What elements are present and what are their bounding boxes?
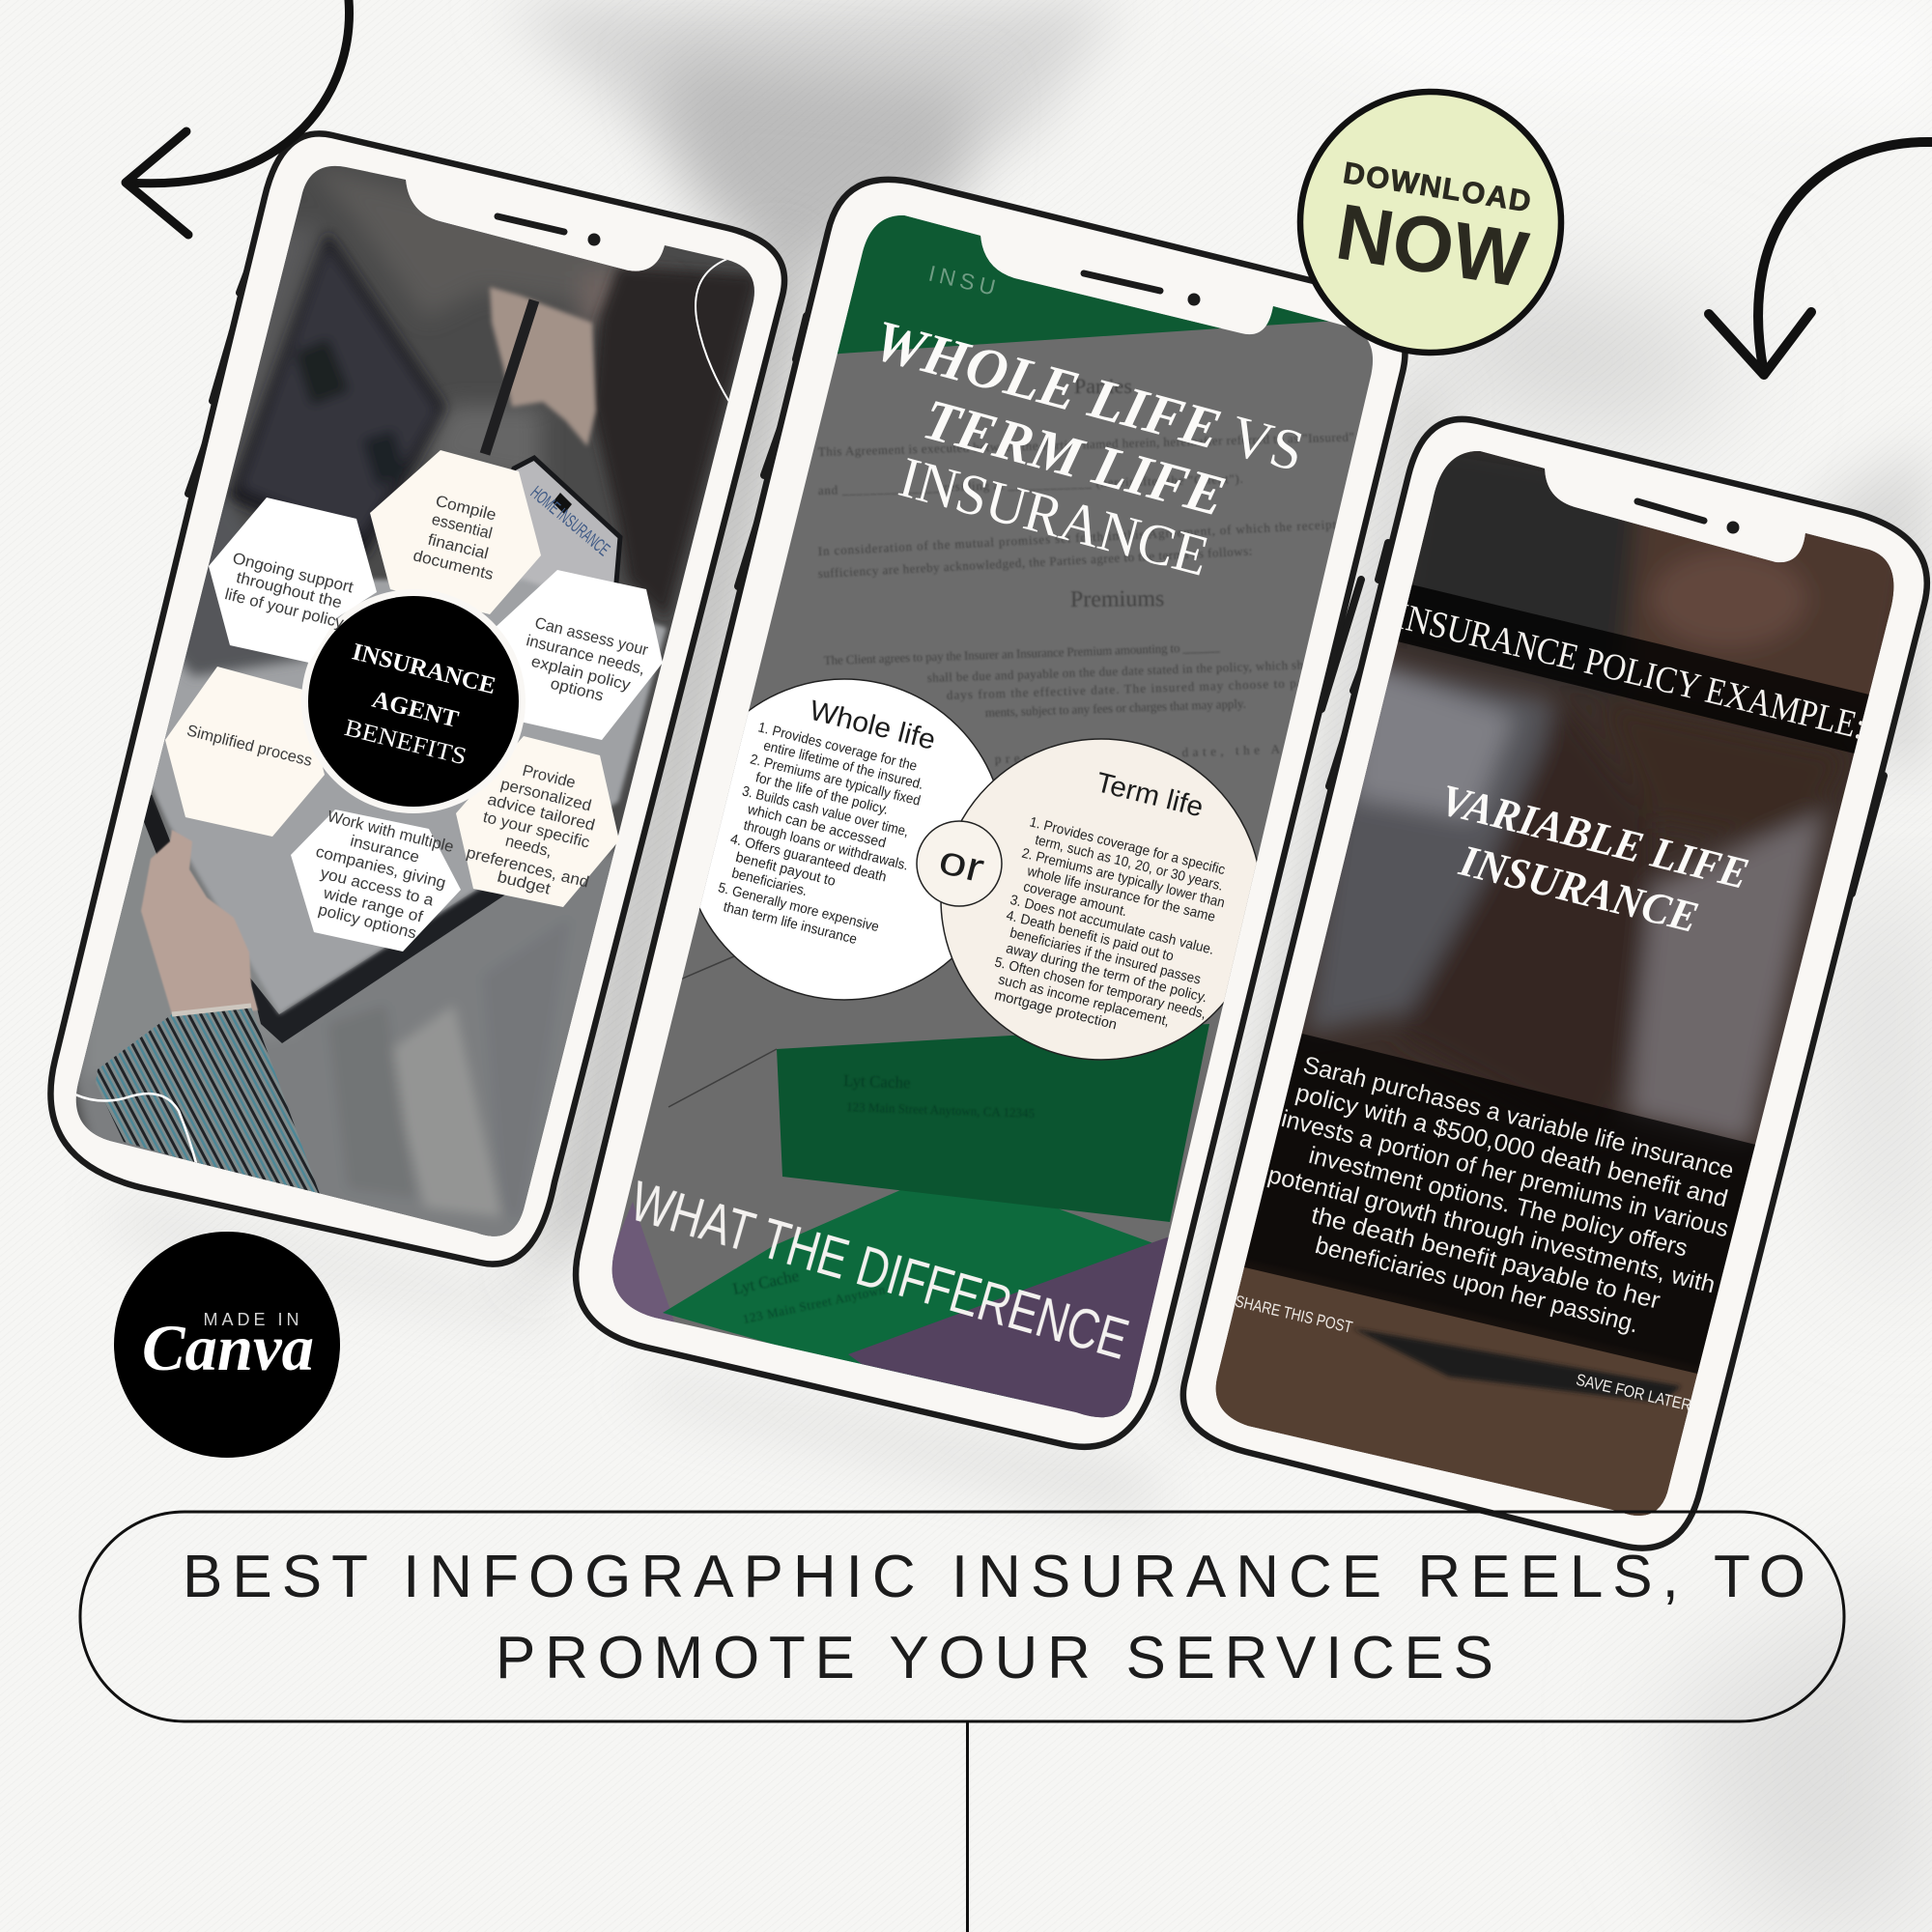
hexagon: compile documents: documents: [412, 547, 496, 583]
hexagon: compile documents: Compile: [434, 493, 497, 525]
hexagon: assess needs: insurance needs,: [525, 632, 647, 678]
title: whole life vs term life insurance: INSURANCE: [893, 444, 1215, 588]
title text: BEST INFOGRAPHIC INSURANCE REELS, TO: [183, 1544, 1805, 1610]
clipboard with home insurance form: [511, 455, 622, 587]
contract text: Lyt Cache: [843, 1071, 911, 1092]
or badge: or: [935, 837, 989, 891]
contract text: shall be due and payable on the due date stated in the policy, which shall be: [927, 656, 1333, 685]
contract text: 123 Main Street Anytown, CA 12345: [846, 1099, 1035, 1121]
hexagon: personalized advice: budget: [496, 868, 553, 898]
phone 2 speaker: [1084, 273, 1160, 291]
hexagon: personalized advice: preferences, and: [465, 844, 590, 892]
phone 1 screen: [58, 145, 773, 1256]
clipboard with home insurance form: HOME INSURANCE: [526, 483, 613, 560]
panel: whole life: entire lifetime of the insured.: [762, 738, 924, 793]
phone 1: insurance agent benefits: [50, 133, 784, 1264]
panel: term life: 2. Premiums are typically lower than: [1020, 846, 1226, 911]
badge: made in canva: MADE IN: [203, 1310, 303, 1329]
phone 2 screen: [612, 215, 1374, 1418]
panel: whole life: than term life insurance: [722, 899, 859, 948]
contract text: In consideration of the mutual promises set forth in this Agreement, of which the receipt: [817, 517, 1337, 558]
panel: whole life: for the life of the policy.: [753, 770, 890, 818]
panel: term life: 1. Provides coverage for a specific: [1028, 814, 1227, 878]
center circle: insurance agent benefits: [301, 589, 526, 813]
contract text: days from the effective date. The insured may choose to pay the: [947, 674, 1333, 702]
center circle: insurance agent benefits: AGENT: [369, 687, 462, 733]
text block: sarah example: investment options. The policy offers: [1306, 1142, 1690, 1263]
panel: whole life: benefit payout to: [734, 850, 838, 890]
title: variable life insurance: INSURANCE: [1454, 836, 1703, 942]
hexagon: simplified process: [165, 667, 325, 837]
phone 1 body: [50, 133, 784, 1264]
panel: term life: 3. Does not accumulate cash value.: [1009, 893, 1215, 958]
phone 3 side buttons: [1329, 543, 1884, 894]
phone 1 speaker: [497, 216, 564, 232]
panel: term life: [941, 739, 1262, 1060]
phone 3 speaker: [1637, 501, 1704, 521]
panel: whole life: Whole life: [807, 696, 939, 756]
contract text: The Client agrees to pay the Insurer an Insurance Premium amounting to ______: [824, 639, 1220, 668]
hexagon: multiple companies: policy options: [317, 901, 418, 942]
panel: term life: Term life: [1093, 767, 1207, 823]
badge: download now: DOWNLOAD: [1341, 156, 1533, 218]
panel: whole life: 5. Generally more expensive: [717, 880, 880, 935]
badge: made in canva: Canva: [142, 1311, 314, 1384]
hexagon: assess needs: [495, 570, 663, 740]
phone 2: whole life vs term life: [576, 180, 1410, 1449]
phone 3: variable life insurance: [1183, 419, 1927, 1548]
badge: download now: [1300, 92, 1561, 353]
hexagon: assess needs: Can assess your: [533, 614, 650, 660]
title: whole life vs term life insurance: TERM LIFE: [917, 386, 1232, 528]
panel: term life: term, such as 10, 20, or 30 years.: [1034, 833, 1225, 895]
phone 3 screen: [1188, 425, 1922, 1536]
hexagon: compile documents: essential: [430, 511, 494, 543]
panel: whole life: 2. Premiums are typically fixed: [749, 752, 922, 810]
center circle: insurance agent benefits: INSURANCE: [350, 639, 498, 699]
band: example title: [1381, 580, 1893, 758]
phone 3 body: [1183, 419, 1927, 1548]
phone 1 photo: person reviewing documents: [58, 145, 773, 1256]
phone 2 camera: [1188, 294, 1200, 305]
panel: whole life: which can be accessed: [745, 802, 888, 851]
band: story text: [1236, 1034, 1768, 1377]
phone 2 body: [576, 180, 1405, 1447]
panel: whole life: 1. Provides coverage for the: [756, 720, 919, 775]
label: save for later: SAVE FOR LATER: [1575, 1371, 1693, 1415]
text block: sarah example: policy with a $500,000 death benefit and: [1293, 1079, 1730, 1212]
text block: sarah example: [1265, 1051, 1737, 1338]
arrow: top left: [126, 0, 349, 235]
contract text: [731, 374, 1362, 1326]
panel: whole life: [684, 679, 1005, 1000]
hexagon: ongoing support: life of your policy: [223, 585, 346, 632]
hexagon: compile documents: financial: [426, 531, 490, 563]
hexagon: ongoing support: [209, 497, 377, 663]
badge: download now: NOW: [1330, 187, 1534, 304]
contract text: and ______________ residing at ____________ (hereinafter the "Client").: [818, 471, 1243, 497]
hexagon: multiple companies: [291, 808, 461, 952]
contract text: premium by the due date, the Agreement: [995, 739, 1362, 766]
hexagon: personalized advice: to your specific: [481, 809, 591, 852]
phone 2 side buttons: [738, 316, 1361, 709]
contract text: 123 Main Street Anytown: [742, 1282, 887, 1326]
text block: sarah example: beneficiaries upon her passing.: [1313, 1232, 1641, 1338]
panel: whole life: beneficiaries.: [730, 866, 809, 899]
title: variable life insurance: VARIABLE LIFE: [1435, 775, 1753, 898]
contract text: Lyt Cache: [731, 1266, 801, 1298]
panel: whole life: through loans or withdrawals.: [742, 818, 910, 874]
phone 3 camera: [1727, 522, 1739, 533]
arrow: top right: [1709, 142, 1932, 375]
hexagon: personalized advice: [456, 736, 619, 907]
title box: [80, 1512, 1844, 1721]
panel: term life: such as income replacement,: [997, 972, 1171, 1030]
label: share this post: SHARE THIS POST: [1234, 1292, 1354, 1337]
panel: term life: coverage amount.: [1022, 879, 1128, 920]
hexagon: personalized advice: needs,: [503, 832, 554, 861]
decorative white curve bottom left: [75, 1094, 196, 1163]
panel: term life: 4. Death benefit is paid out to: [1005, 908, 1176, 965]
panel: term life: 5. Often chosen for temporary needs,: [993, 954, 1208, 1022]
phone 2 photo: contract on desk: [612, 215, 1374, 1418]
hexagon: multiple companies: you access to a: [319, 865, 436, 910]
panel: term life: whole life insurance for the same: [1025, 864, 1217, 925]
title text: [183, 1544, 1805, 1691]
panel: term life: away during the term of the policy.: [1005, 941, 1208, 1006]
heading: what the difference: WHAT THE DIFFERENCE: [624, 1170, 1135, 1372]
center circle: insurance agent benefits: BENEFITS: [342, 715, 469, 770]
hexagon: multiple companies: Work with multiple: [326, 808, 455, 856]
contract text: Parties: [1074, 374, 1132, 398]
hexagon: assess needs: options: [549, 675, 606, 705]
text block: sarah example: Sarah purchases a variable life insurance: [1300, 1051, 1737, 1184]
panel: term life: mortgage protection: [993, 987, 1119, 1033]
badge: made in canva: [114, 1232, 340, 1458]
contract text: sufficiency are hereby acknowledged, the Parties agree to the terms as follows:: [817, 543, 1253, 581]
text block: sarah example: the death benefit payable to her: [1309, 1202, 1662, 1315]
hexagon: simplified process: Simplified process: [185, 722, 314, 770]
hexagon: multiple companies: insurance: [349, 833, 421, 867]
text block: sarah example: potential growth through investments, with: [1265, 1161, 1718, 1298]
panel: whole life: 3. Builds cash value over time,: [741, 783, 910, 840]
hexagon: multiple companies: wide range of: [321, 884, 425, 926]
hexagon: ongoing support: Ongoing support: [231, 550, 355, 596]
hexagon: personalized advice: advice tailored: [486, 791, 597, 835]
phone 1 camera: [587, 234, 601, 245]
faint brand text: INSU: [926, 261, 1003, 301]
stem line: [966, 1721, 969, 1932]
phone 1 side buttons: [188, 254, 254, 494]
contract text: Premiums: [1070, 586, 1164, 612]
hexagon: multiple companies: companies, giving: [314, 843, 447, 893]
or badge: [917, 821, 1002, 906]
title: whole life vs term life insurance: WHOLE LIFE VS: [867, 308, 1310, 484]
hexagon: compile documents: [370, 450, 541, 614]
contract text: ments, subject to any fees or charges that may apply.: [985, 696, 1246, 720]
title text: PROMOTE YOUR SERVICES: [496, 1625, 1493, 1691]
phone 3 photo: woman at desk: [1188, 425, 1922, 1536]
panel: term life: beneficiaries if the insured passes: [1009, 925, 1203, 988]
decorative white curve top right: [696, 259, 729, 402]
text: insurance policy example: INSURANCE POLICY EXAMPLE:: [1392, 595, 1869, 748]
panel: whole life: 4. Offers guaranteed death: [728, 832, 888, 886]
contract text: This Agreement is executed between the Parties named herein, hereinafter referred to as "Insured": [818, 430, 1354, 459]
hexagon: assess needs: explain policy: [529, 653, 633, 695]
hexagon: personalized advice: Provide: [521, 762, 578, 792]
hexagon: ongoing support: throughout the: [235, 569, 344, 611]
hexagon: personalized advice: personalized: [498, 776, 593, 814]
title: whole life vs term life insurance: [883, 322, 1302, 576]
text block: sarah example: invests a portion of her premiums in various: [1279, 1105, 1731, 1242]
